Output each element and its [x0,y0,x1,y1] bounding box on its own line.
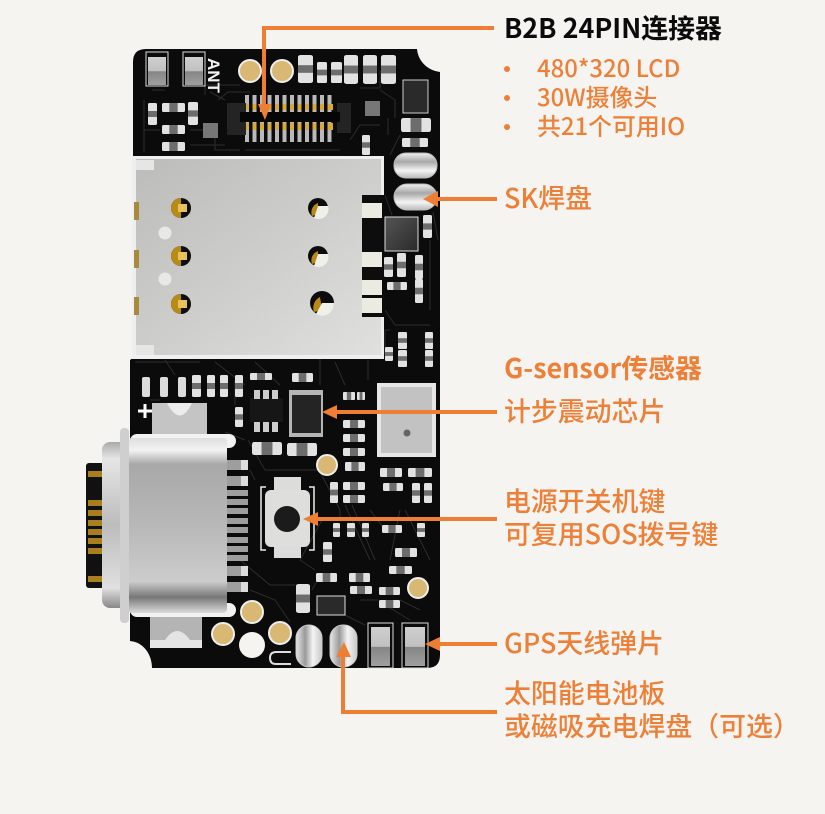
arrow: B2B connector [258,28,494,120]
U silkscreen [270,652,291,664]
top SMD components [148,55,433,367]
plus mark [138,404,152,418]
circuit traces [135,70,438,625]
heading: B2B connector: B2B 24PIN连接器 [504,7,722,46]
power button [261,477,314,558]
label: GPS clip: GPS天线弹片 [504,622,664,661]
label: solar or magnetic pad [504,672,800,744]
heading: G-sensor: G-sensor传感器 [504,347,702,386]
label: solar or magnetic pad: 或磁吸充电焊盘（可选） [504,705,800,744]
list: connector features: 共21个可用IO [537,107,685,142]
GPS clips [368,623,428,668]
step chip group [250,390,323,437]
label: power button: 电源开关机键 [504,480,665,519]
list: connector features: 30W摄像头 [537,78,657,113]
small square chips [203,101,380,138]
arrow: SK pad [423,191,497,207]
B2B connector [227,95,351,142]
label: power button [504,480,718,552]
arrow: step chip [322,405,497,419]
arrow: power button [303,512,497,526]
label: solar or magnetic pad: 太阳能电池板 [504,672,665,711]
arrow: solar pad [336,642,497,712]
solar pads [296,625,357,667]
lower SMD components [142,373,432,613]
square chip [385,217,418,251]
USB-C connector [86,403,248,648]
label: SK pad: SK焊盘 [504,177,592,216]
label: power button: 可复用SOS拨号键 [504,513,718,552]
ANT antenna clips [146,52,223,94]
list: connector features: 480*320 LCD [537,49,680,84]
SK pads [394,153,437,210]
top gold pads [239,60,293,82]
top right chip [403,80,428,113]
microphone can [377,383,436,457]
list: connector features [504,49,685,142]
label: step vibration chip: 计步震动芯片 [504,390,665,429]
lower gold pads [212,455,428,645]
arrow: GPS clip [425,637,497,651]
mounting hole [239,632,265,658]
ANT antenna clips: ANT [204,58,223,94]
diode [317,596,345,615]
PCB board [86,49,440,668]
SIM card shield [132,156,385,359]
